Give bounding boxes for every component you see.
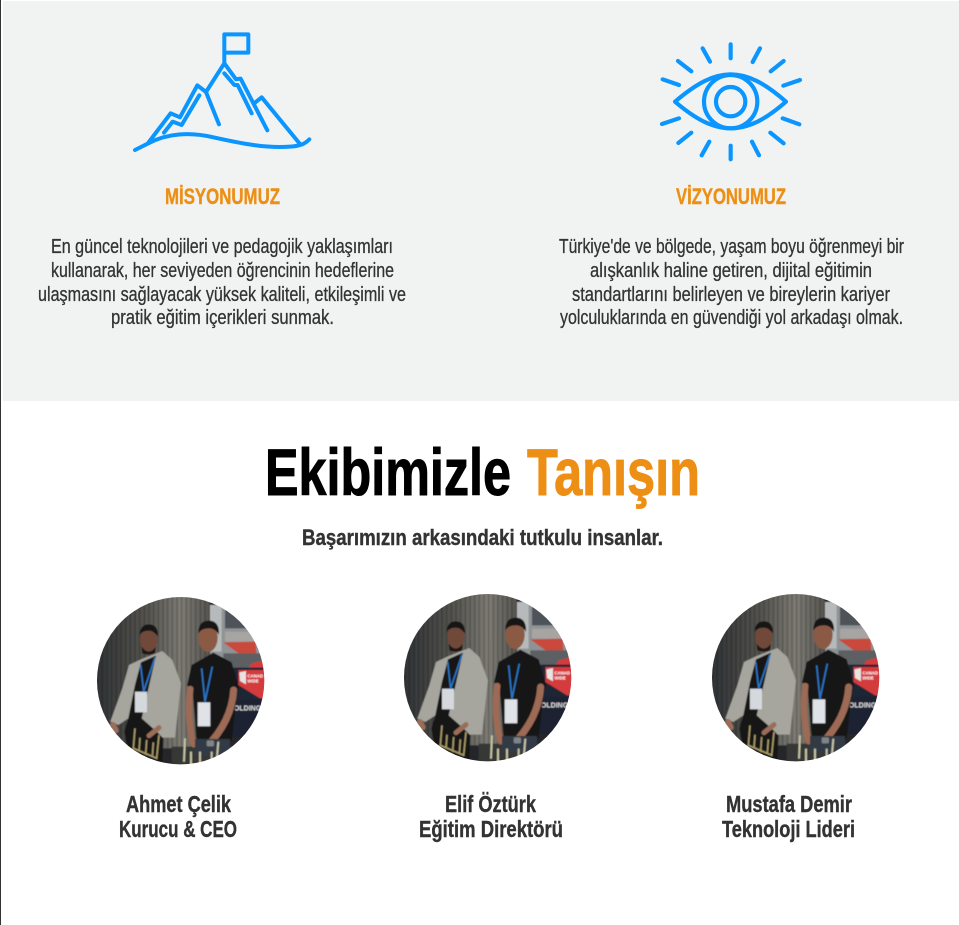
team member: Elif Öztürk bbox=[392, 582, 583, 842]
name and role: Elif Öztürk bbox=[419, 791, 563, 842]
text block: mission: ulaşmasını sağlayacak yüksek kaliteli, etkileşimli ve bbox=[38, 284, 406, 306]
text block: mission: kullanarak, her seviyeden öğrencinin hedeflerine bbox=[51, 260, 394, 282]
icon: eye bbox=[662, 44, 800, 159]
team member: Ahmet Çelik bbox=[85, 585, 276, 842]
name and role: Mustafa Demir bbox=[722, 791, 855, 842]
heading: vision: VİZYONUMUZ bbox=[676, 184, 786, 209]
name and role: Ahmet Çelik: Ahmet Çelik bbox=[126, 791, 231, 817]
text block: mission bbox=[38, 236, 406, 329]
name and role: Ahmet Çelik: Kurucu & CEO bbox=[119, 816, 237, 842]
title: Ekibimizle bbox=[265, 435, 511, 509]
name and role: Mustafa Demir: Teknoloji Lideri bbox=[722, 816, 855, 842]
name and role: Elif Öztürk: Eğitim Direktörü bbox=[419, 816, 563, 842]
text block: mission: pratik eğitim içerikleri sunmak. bbox=[111, 307, 334, 329]
photo: Mustafa Demir bbox=[700, 582, 891, 773]
text block: vision: standartlarını belirleyen ve bireylerin kariyer bbox=[572, 284, 890, 306]
heading: mission: MİSYONUMUZ bbox=[165, 184, 280, 209]
panel: mission and vision bbox=[3, 1, 959, 401]
subtitle: Başarımızın arkasındaki tutkulu insanlar. bbox=[302, 525, 663, 550]
photo: Elif Öztürk bbox=[392, 582, 583, 773]
page edge line bbox=[0, 0, 1, 925]
photo: Ahmet Çelik bbox=[85, 585, 276, 776]
text block: vision: alışkanlık haline getiren, dijital eğitimin bbox=[590, 260, 872, 282]
name and role: Mustafa Demir: Mustafa Demir bbox=[726, 791, 852, 817]
text block: vision bbox=[559, 236, 904, 329]
icon: mountain with flag bbox=[135, 34, 309, 150]
title: Tanışın bbox=[527, 435, 700, 509]
text block: mission: En güncel teknolojileri ve pedagojik yaklaşımları bbox=[51, 236, 393, 258]
name and role: Elif Öztürk: Elif Öztürk bbox=[445, 791, 536, 817]
team member: Mustafa Demir bbox=[700, 582, 891, 842]
name and role: Ahmet Çelik bbox=[119, 791, 237, 842]
